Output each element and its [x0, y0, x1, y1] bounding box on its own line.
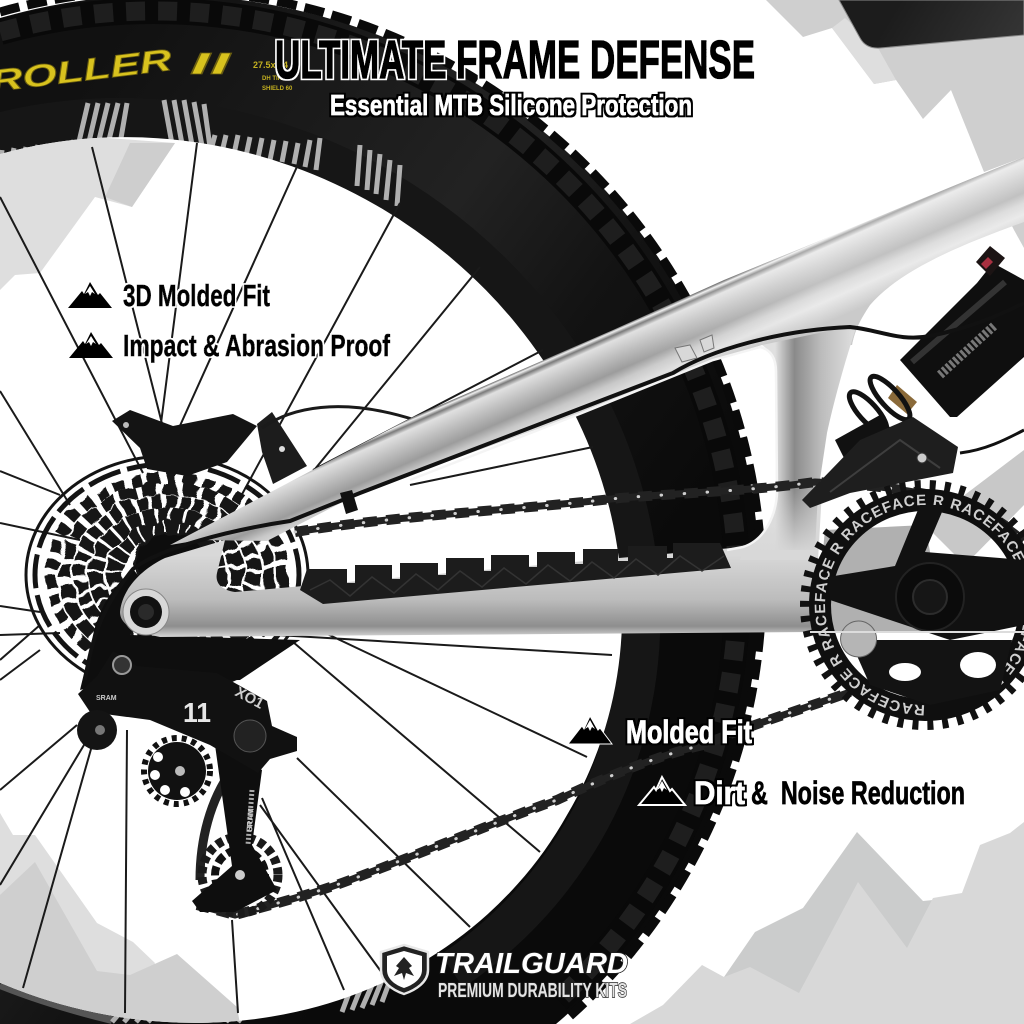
icon: shield	[381, 945, 428, 994]
feature: Dirt and Noise Reduction	[639, 775, 965, 811]
dropout black	[80, 569, 300, 690]
silver frame triangle	[80, 157, 1024, 690]
logo: Trailguard	[381, 945, 628, 1002]
wordmark: TRAILGUARD	[435, 948, 628, 980]
tire body	[0, 0, 760, 1024]
icon: mountain	[568, 716, 612, 744]
cable along tube	[85, 303, 1024, 680]
spokes	[0, 143, 612, 1013]
feature: Molded Fit	[568, 714, 752, 750]
tire brand lettering	[0, 42, 293, 99]
rear derailleur	[77, 651, 297, 913]
silicone chainstay protector	[300, 543, 731, 604]
lower tube	[120, 490, 822, 637]
tire tread knobs	[0, 0, 762, 1016]
seat tube blend	[740, 490, 820, 560]
lower pulley and cage	[192, 745, 278, 913]
rear derailleur: XO1	[232, 684, 267, 713]
upper tube right sheen	[613, 157, 1024, 398]
subtitle: Essential MTB Silicone Protection	[330, 90, 692, 122]
chainring and crank	[800, 480, 1024, 730]
rotor rings	[26, 456, 308, 694]
dark seat-tube silhouette top right	[839, 0, 1024, 48]
label: Dirt: Dirt	[694, 775, 745, 811]
shock absorber	[835, 246, 1024, 470]
upper chain	[295, 482, 1024, 540]
label: 3D Molded Fit	[123, 278, 270, 313]
inner mountains seen through the wheel	[0, 130, 240, 1024]
right chainstay behind chainring	[925, 450, 1024, 565]
tire brand lettering: 27.5x2.4	[253, 60, 288, 70]
rim band	[0, 118, 640, 971]
mountains: top right	[766, 0, 1024, 248]
lower chain	[197, 692, 850, 915]
tire brand lettering: II	[190, 46, 233, 81]
window highlight	[410, 347, 777, 550]
rim lower grey edge	[0, 985, 112, 1020]
upper pulley	[144, 738, 210, 804]
chain guide	[802, 417, 958, 508]
tagline: PREMIUM DURABILITY KITS	[438, 980, 627, 1002]
rim stripes	[0, 100, 400, 1022]
feature: Impact and Abrasion Proof	[69, 328, 390, 363]
feature: 3D Molded Fit	[68, 278, 270, 313]
icon: mountain	[69, 332, 113, 358]
bottom bracket silver	[815, 525, 945, 632]
derailleur body	[78, 651, 297, 773]
label: Impact & Abrasion Proof	[123, 328, 390, 363]
seat tube	[745, 325, 857, 550]
sprockets	[51, 477, 283, 673]
brake caliper and cable	[112, 407, 415, 484]
tire brand lettering: SHIELD 60	[262, 86, 293, 92]
derailleur labels: 11	[183, 697, 211, 728]
cassette and rotor	[26, 456, 308, 694]
crank spider	[828, 505, 1024, 640]
wheel opening	[0, 137, 622, 1023]
rear derailleur: SRAM	[96, 695, 117, 702]
second cable	[960, 430, 1024, 453]
icon: mountain	[639, 777, 685, 805]
cable clips	[340, 490, 358, 514]
rear wheel	[0, 0, 762, 1024]
icon: mountain	[68, 282, 112, 308]
upper tube	[170, 157, 1024, 545]
rear derailleur: SRAM	[245, 808, 256, 832]
mountains: bottom right	[630, 822, 1024, 1024]
pivot bearing	[123, 589, 169, 635]
tire brand lettering: DH TIRE	[262, 76, 286, 82]
title: ULTIMATE FRAME DEFENSE	[275, 30, 755, 90]
label: Molded Fit	[626, 714, 752, 750]
